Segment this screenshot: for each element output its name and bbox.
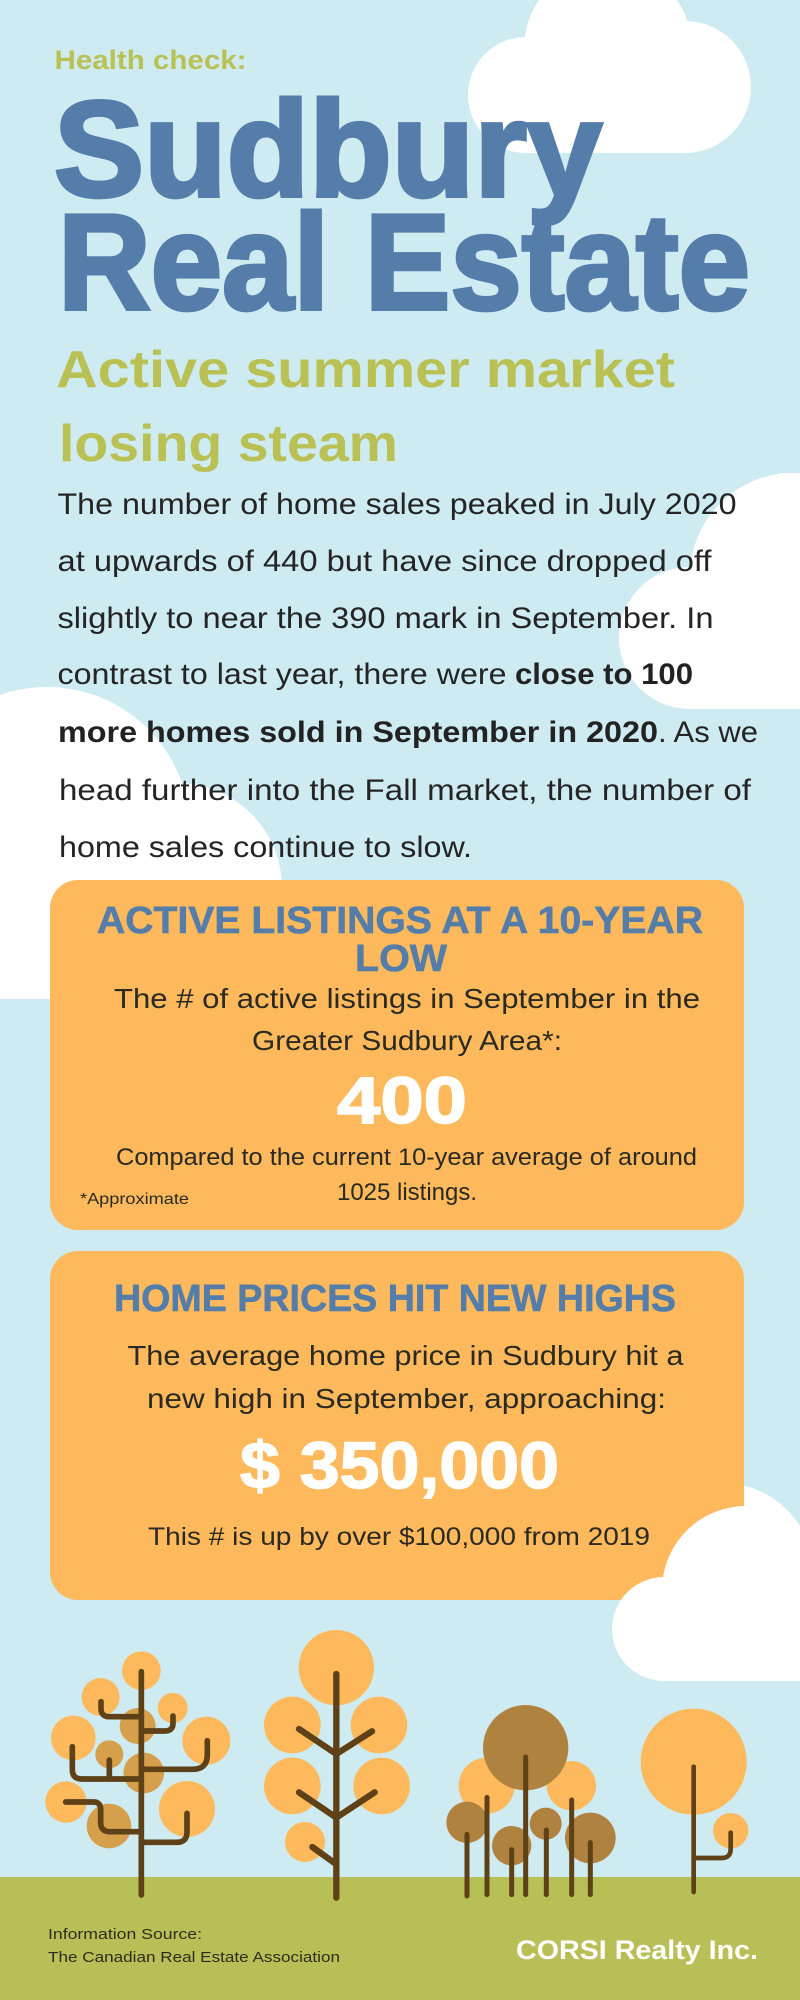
body paragraph: more homes sold in September in 2020 bbox=[58, 716, 658, 749]
tree 2 bbox=[264, 1630, 410, 1898]
title: Sudbury bbox=[54, 73, 602, 225]
cloud: back lobe behind price card bbox=[630, 1483, 800, 1667]
body paragraph: The number of home sales peaked in July 2020 bbox=[58, 488, 736, 521]
description: The average home price in Sudbury hit a bbox=[128, 1340, 684, 1371]
subtitle: Active summer market bbox=[56, 341, 675, 399]
body paragraph: at upwards of 440 but have since dropped off bbox=[58, 545, 712, 578]
footnote: *Approximate bbox=[80, 1191, 189, 1208]
information source: The Canadian Real Estate Association bbox=[48, 1949, 340, 1966]
title bbox=[54, 73, 750, 338]
body paragraph bbox=[58, 488, 758, 864]
body paragraph: home sales continue to slow. bbox=[59, 831, 472, 864]
cloud: middle right bbox=[619, 473, 800, 709]
panel: active listings bbox=[50, 880, 744, 1230]
body paragraph: . As we bbox=[658, 716, 758, 749]
subtitle bbox=[56, 341, 675, 473]
heading: home prices: HOME PRICES HIT NEW HIGHS bbox=[114, 1278, 676, 1320]
description second line: Greater Sudbury Area*: bbox=[252, 1025, 562, 1056]
body paragraph: contrast to last year, there were bbox=[58, 658, 506, 691]
description: The # of active listings in September in the bbox=[114, 983, 700, 1014]
cloud: top right bbox=[468, 0, 751, 153]
subtitle: losing steam bbox=[59, 415, 398, 473]
heading: active listings: ACTIVE LISTINGS AT A 10-YEAR bbox=[97, 900, 703, 942]
information source: Information Source: bbox=[48, 1926, 202, 1943]
tree 4 bbox=[641, 1709, 748, 1892]
comparison second line: 1025 listings. bbox=[337, 1179, 477, 1206]
body paragraph: close to 100 bbox=[515, 658, 693, 691]
big number: price: $ 350,000 bbox=[240, 1428, 559, 1502]
tree 1 bbox=[45, 1651, 230, 1895]
title: Real Estate bbox=[58, 186, 750, 338]
body paragraph: head further into the Fall market, the number of bbox=[59, 774, 752, 807]
panel: home prices bbox=[50, 1251, 744, 1600]
description second line: new high in September, approaching: bbox=[147, 1383, 666, 1414]
small heading: Health check: Health check: bbox=[54, 45, 246, 75]
information source bbox=[48, 1926, 340, 1966]
ground bbox=[0, 1877, 800, 2000]
heading second line: LOW bbox=[355, 938, 447, 980]
big number: 400: 400 bbox=[337, 1063, 467, 1137]
cloud: middle left bbox=[0, 687, 282, 999]
comparison text: Compared to the current 10-year average of around bbox=[116, 1144, 697, 1171]
brand: CORSI Realty: CORSI Realty Inc. bbox=[516, 1935, 758, 1965]
comparison text: This # is up by over $100,000 from 2019 bbox=[148, 1523, 650, 1551]
body paragraph: slightly to near the 390 mark in September. In bbox=[58, 602, 714, 635]
cloud: bottom right front bbox=[612, 1506, 800, 1681]
tree group 3 bbox=[446, 1705, 616, 1896]
